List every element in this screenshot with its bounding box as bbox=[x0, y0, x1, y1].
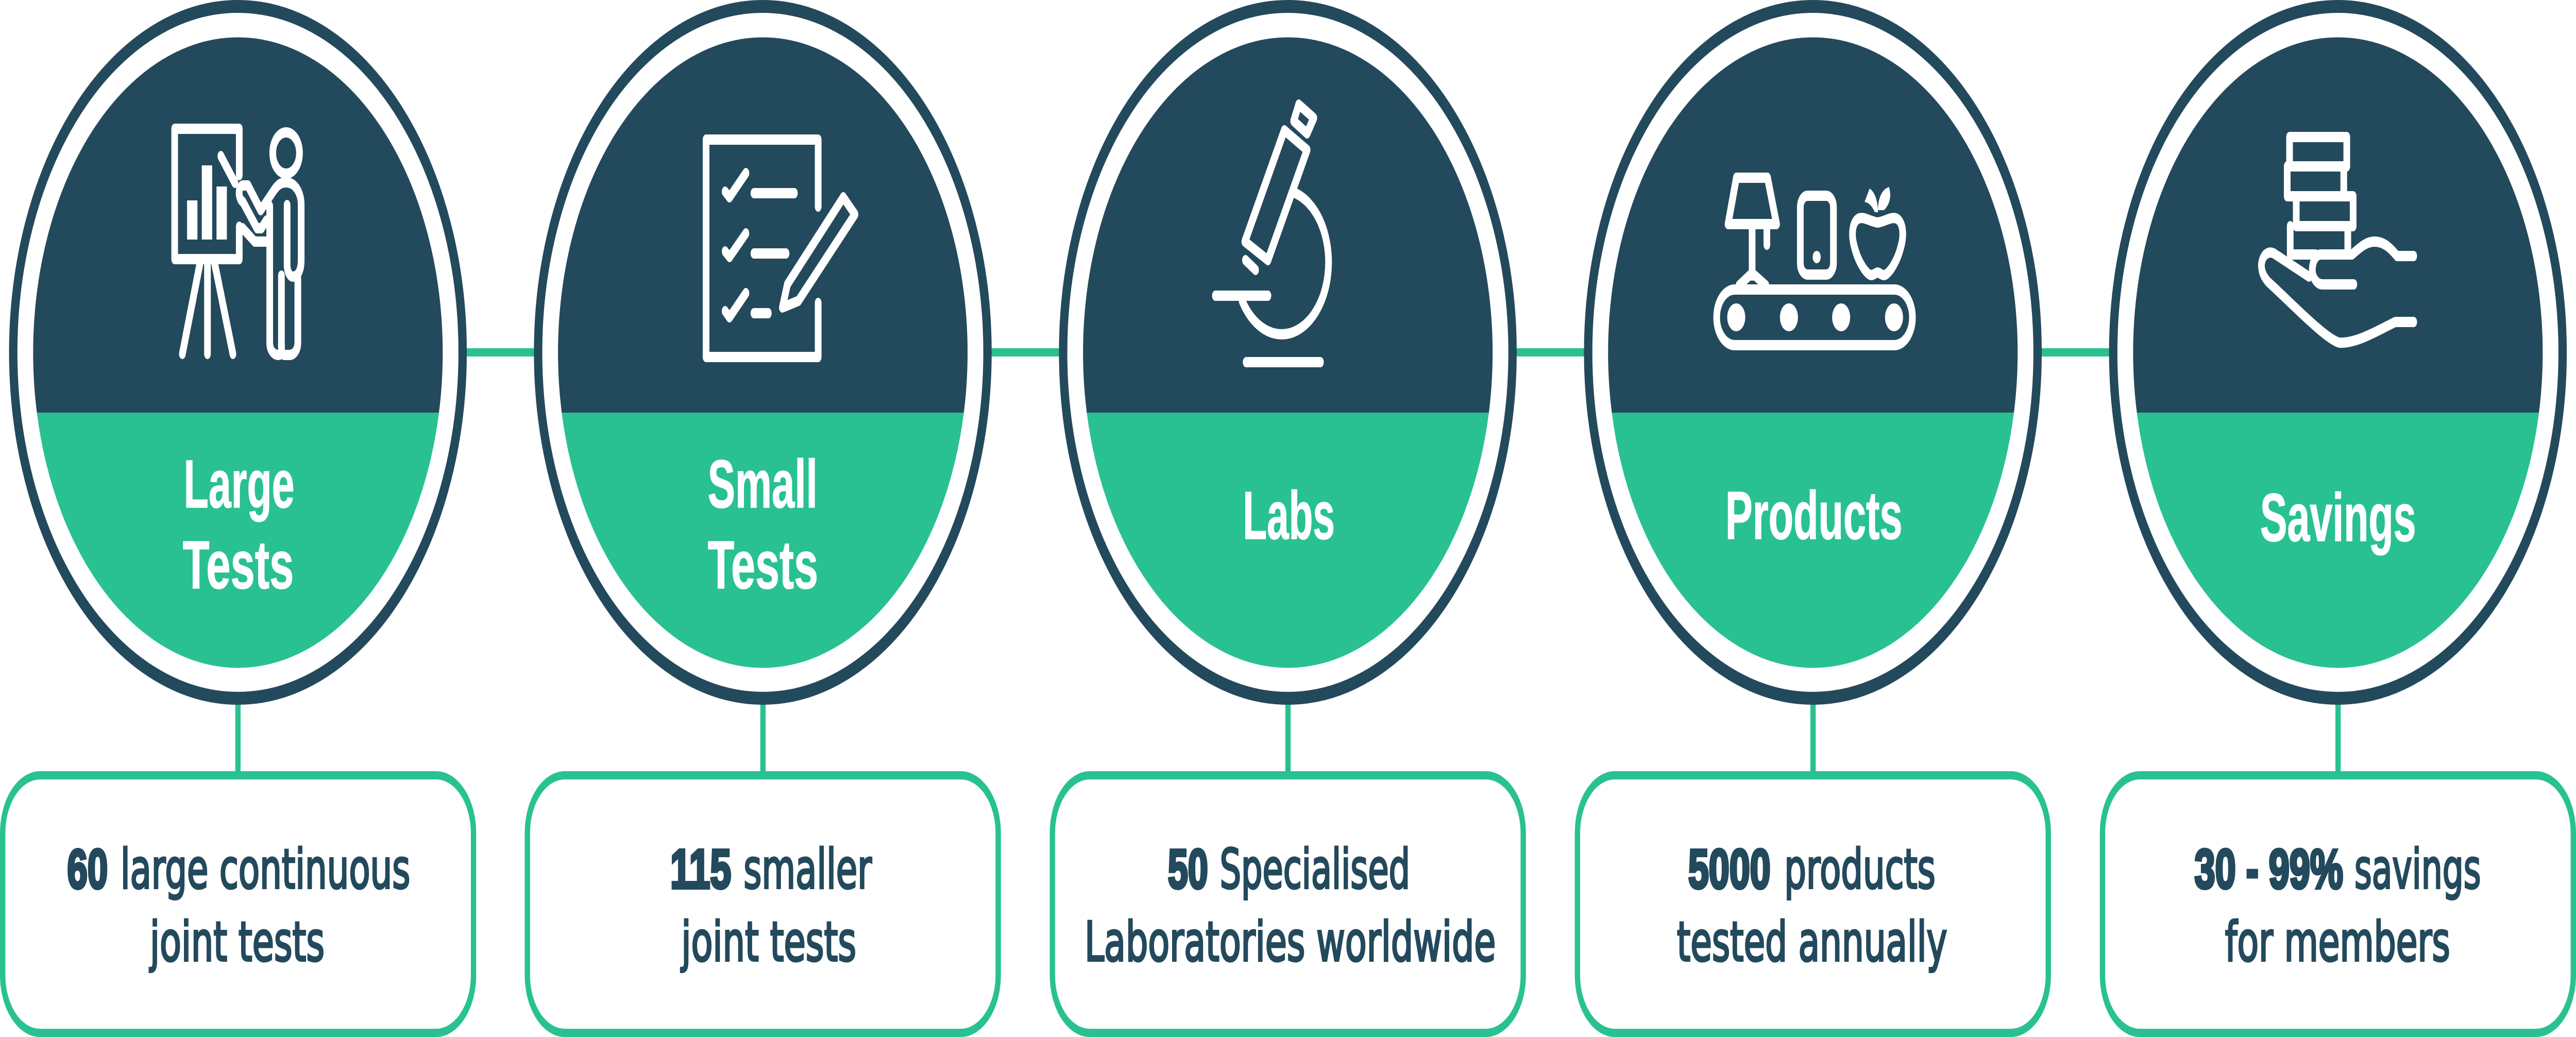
callout box: savings: savings bbox=[2354, 838, 2481, 902]
panel: products bbox=[1578, 6, 2048, 1033]
circle badge: small tests bbox=[538, 6, 988, 699]
callout box: savings: for members bbox=[2225, 911, 2450, 974]
vertical connector: savings bbox=[2335, 704, 2341, 773]
callout box: savings bbox=[2103, 775, 2573, 1033]
icon: presenter at chart board bbox=[175, 129, 301, 355]
callout box: products: products bbox=[1784, 838, 1936, 902]
heading: small tests: Tests bbox=[708, 526, 818, 603]
callout box: large tests: large continuous bbox=[121, 838, 410, 902]
vertical connector: labs bbox=[1285, 704, 1291, 773]
heading: small tests: Small bbox=[708, 446, 818, 522]
panel: large tests bbox=[3, 6, 473, 1033]
timeline connector: labs to products bbox=[1517, 348, 1584, 356]
callout box: small tests bbox=[528, 775, 998, 1033]
heading: savings: Savings bbox=[2260, 479, 2416, 555]
heading: products: Products bbox=[1725, 477, 1903, 553]
circle badge: labs bbox=[1063, 6, 1513, 699]
callout box: products: 5000 bbox=[1688, 839, 1771, 900]
vertical connector: small tests bbox=[760, 704, 766, 773]
timeline connector: small tests to labs bbox=[992, 348, 1059, 356]
panel: labs bbox=[1053, 6, 1523, 1033]
timeline connector: large tests to small tests bbox=[467, 348, 534, 356]
icon: checklist and pencil bbox=[706, 140, 855, 357]
callout box: large tests: joint tests bbox=[149, 911, 325, 974]
callout box: small tests: joint tests bbox=[681, 911, 856, 974]
heading: labs: Labs bbox=[1243, 477, 1335, 553]
circle badge: savings bbox=[2113, 6, 2563, 699]
heading: small tests bbox=[708, 446, 818, 603]
callout box: labs bbox=[1053, 775, 1523, 1033]
circle badge: large tests bbox=[13, 6, 463, 699]
heading: large tests: Tests bbox=[183, 526, 294, 603]
callout box: labs: 50 bbox=[1168, 839, 1208, 900]
vertical connector: large tests bbox=[235, 704, 241, 773]
callout box: small tests: smaller bbox=[743, 838, 872, 902]
icon: conveyor belt with lamp, tablet and apple bbox=[1717, 178, 1912, 345]
heading: large tests bbox=[183, 446, 295, 603]
callout box: labs: Specialised bbox=[1219, 838, 1410, 902]
callout box: labs: Laboratories worldwide bbox=[1084, 911, 1496, 974]
circle badge: products bbox=[1588, 6, 2038, 699]
callout box: savings: 30 - 99% bbox=[2195, 839, 2343, 900]
timeline connector: products to savings bbox=[2042, 348, 2109, 356]
callout box: small tests: 115 bbox=[670, 839, 731, 900]
vertical connector: products bbox=[1810, 704, 1816, 773]
icon: microscope bbox=[1215, 105, 1329, 362]
panel: small tests bbox=[528, 6, 998, 1033]
panel: savings bbox=[2103, 6, 2573, 1033]
callout box: large tests bbox=[3, 775, 473, 1033]
icon: hand holding coin stack bbox=[2261, 137, 2414, 343]
callout box: large tests: 60 bbox=[67, 839, 108, 900]
heading: large tests: Large bbox=[184, 446, 295, 522]
callout box: products: tested annually bbox=[1677, 911, 1947, 974]
callout box: products bbox=[1578, 775, 2048, 1033]
